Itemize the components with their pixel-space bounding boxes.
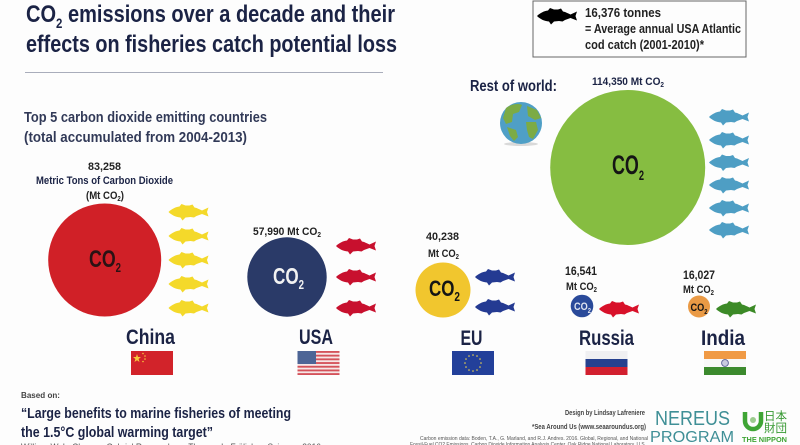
yellow CO2 circle: CO xyxy=(429,276,462,301)
China value label xyxy=(36,161,173,203)
India value label xyxy=(683,270,715,297)
China value label: (Mt CO xyxy=(86,190,122,202)
panel: rest of world xyxy=(470,76,749,245)
legend text: 16,376 tonnes xyxy=(585,6,661,20)
China value label: Metric Tons of Carbon Dioxide xyxy=(36,175,173,187)
legend text xyxy=(585,6,741,52)
red fish xyxy=(599,301,639,318)
credits xyxy=(410,408,648,445)
orange CO2 circle: CO xyxy=(690,302,707,314)
subheading: Top 5 carbon dioxide emitting countries xyxy=(24,110,267,126)
citation: Based on: xyxy=(21,390,60,400)
yellow CO2 circle xyxy=(416,262,470,318)
icon: black cod fish xyxy=(537,8,577,24)
rest of world value: 2 xyxy=(660,82,664,89)
panel: Russia xyxy=(565,266,639,375)
flag: EU xyxy=(452,351,494,375)
orange CO2 circle: 2 xyxy=(704,309,708,316)
USA value label: 2 xyxy=(317,232,321,239)
yellow CO2 circle: 2 xyxy=(454,289,460,304)
navy CO2 circle: 2 xyxy=(299,277,304,292)
red CO2 circle: 2 xyxy=(116,260,121,275)
title: emissions over a decade and their xyxy=(62,1,395,28)
subheading xyxy=(24,110,267,146)
yellow fish column xyxy=(168,204,208,316)
citation: the 1.5°C global warming target” xyxy=(21,424,213,441)
rest of world value: 114,350 Mt CO xyxy=(592,76,667,88)
Russia value label: Mt CO xyxy=(566,281,598,293)
Russia value label: 2 xyxy=(594,287,597,294)
panel: USA xyxy=(247,226,376,375)
logo: The Nippon Foundation xyxy=(742,408,787,444)
logo: Nereus Program xyxy=(650,408,734,445)
EU country name: EU xyxy=(460,327,482,350)
legend text: = Average annual USA Atlantic xyxy=(585,22,741,36)
navy CO2 circle: CO xyxy=(273,263,308,289)
navy CO2 circle xyxy=(571,295,593,317)
logo: The Nippon Foundation: 財団 xyxy=(764,420,787,436)
red CO2 circle xyxy=(48,204,161,316)
India value label: 2 xyxy=(711,290,714,297)
icon: globe xyxy=(500,102,542,146)
red CO2 circle: CO xyxy=(89,246,125,273)
USA country name: USA xyxy=(299,326,333,349)
logo: Nereus Program: NEREUS xyxy=(655,408,730,430)
navy CO2 circle: 2 xyxy=(588,308,591,315)
title xyxy=(26,1,397,58)
China value label: ) xyxy=(121,190,124,202)
title: CO xyxy=(26,1,63,28)
green CO2 circle: 2 xyxy=(639,167,644,183)
logo: The Nippon Foundation: 日本 xyxy=(764,408,787,424)
navy CO2 circle xyxy=(247,237,327,317)
China value label: 2 xyxy=(117,196,121,203)
red fish column xyxy=(336,238,376,316)
navy fish column xyxy=(475,269,515,316)
title: 2 xyxy=(56,15,63,31)
green fish xyxy=(716,301,756,318)
EU value label xyxy=(426,231,459,261)
flag: India xyxy=(704,351,746,375)
citation xyxy=(21,390,321,445)
blue fish column xyxy=(709,109,749,238)
navy CO2 circle: CO xyxy=(574,301,590,313)
title: effects on fisheries catch potential loss xyxy=(26,31,397,58)
China value label: 83,258 xyxy=(88,161,121,173)
legend box xyxy=(533,1,746,57)
USA value label: 57,990 Mt CO xyxy=(253,226,322,238)
logo: The Nippon Foundation: THE NIPPON xyxy=(742,435,787,444)
flag: Russia xyxy=(586,351,628,375)
EU value label: 2 xyxy=(456,254,459,261)
Russia value label xyxy=(565,266,598,294)
credits: Carbon emission data: Boden, T.A., G. Marland, and R.J. Andres. 2016. Global, Regional, and National xyxy=(420,436,648,442)
credits: Design by Lindsay Lafreniere xyxy=(565,408,645,417)
credits: *Sea Around Us (www.seaaroundus.org) xyxy=(532,422,646,431)
panel: EU xyxy=(416,231,515,375)
green CO2 circle xyxy=(550,90,705,245)
India value label: 16,027 xyxy=(683,270,715,282)
flag: China xyxy=(131,351,173,375)
India country name: India xyxy=(701,327,745,350)
Russia value label: 16,541 xyxy=(565,266,598,278)
flag: USA xyxy=(298,351,340,375)
India value label: Mt CO xyxy=(683,284,715,296)
panel: India xyxy=(683,270,756,375)
subheading: (total accumulated from 2004-2013) xyxy=(24,130,247,146)
legend text: cod catch (2001-2010)* xyxy=(585,38,704,52)
green CO2 circle: CO xyxy=(612,150,652,180)
orange CO2 circle xyxy=(688,296,710,318)
EU value label: Mt CO xyxy=(428,248,460,260)
EU value label: 40,238 xyxy=(426,231,459,243)
citation: “Large benefits to marine fisheries of meeting xyxy=(21,405,291,422)
panel: China xyxy=(36,161,208,375)
Russia country name: Russia xyxy=(579,327,634,350)
China country name: China xyxy=(126,326,175,349)
rest of world heading: Rest of world: xyxy=(470,78,557,95)
